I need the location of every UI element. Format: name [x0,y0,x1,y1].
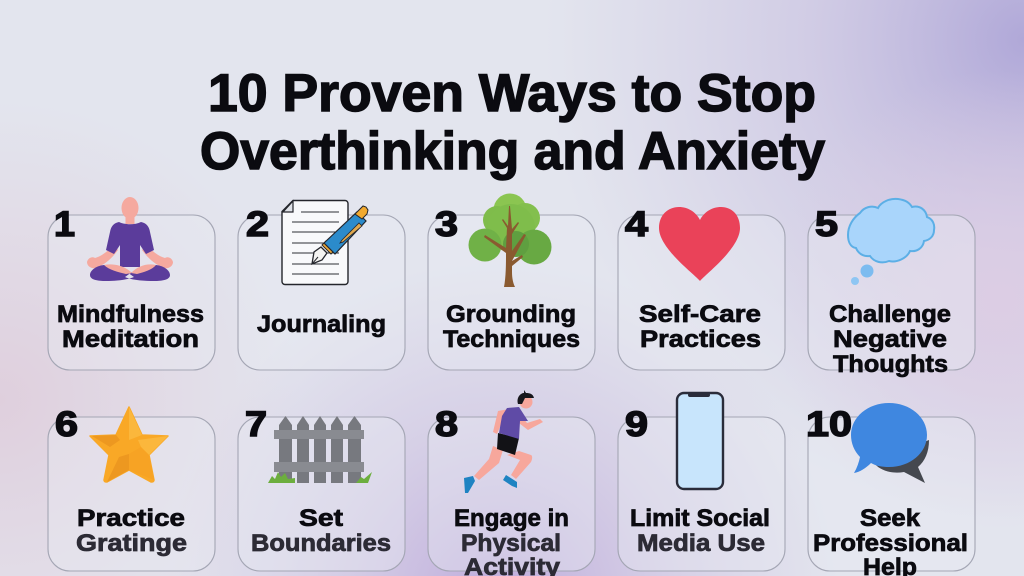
label: Journaling [257,311,386,338]
panel: 10 Seek Professional Help [806,403,975,576]
number 6: 6 [55,405,78,444]
label: Mindfulness [57,301,204,328]
panel: 5 Challenge Negative Thoughts [808,199,975,378]
panel: 6 Practice Gratinge [48,405,215,571]
icon: paper and pen [282,200,368,284]
number 2: 2 [246,205,269,244]
label [829,301,951,378]
label: Practices [640,326,761,353]
number 1: 1 [54,205,75,244]
label: Techniques [443,326,580,353]
icon: tree [468,194,552,287]
number 7: 7 [245,405,267,444]
label [57,301,204,353]
icon: runner [464,390,543,493]
label [454,505,569,576]
label: Seek [860,505,920,532]
label: Set [299,505,343,532]
title [200,64,826,181]
label [630,505,770,557]
label: Physical [461,530,561,557]
label: Challenge [829,301,951,328]
icon: smartphone [677,393,723,489]
panel: 9 Limit Social Media Use [618,393,785,571]
label: Limit Social [630,505,770,532]
number 10: 10 [806,405,852,444]
label: Negative [833,326,947,353]
label: Thoughts [833,351,948,378]
label [251,505,391,557]
label [639,301,761,353]
label: Professional [813,530,968,557]
label: Engage in [454,505,569,532]
label: Self-Care [639,301,761,328]
panel: 4 Self-Care Practices [618,205,785,370]
icon: thought cloud [848,199,934,285]
label: Grounding [446,301,576,328]
number 8: 8 [435,405,458,444]
number 9: 9 [625,405,648,444]
label: Boundaries [251,530,391,557]
icon: speech bubbles [851,403,929,483]
label: Media Use [637,530,765,557]
label: Gratinge [76,530,187,557]
panel: 3 Grounding Techniques [428,194,595,370]
number 5: 5 [815,205,838,244]
icon: meditating person [87,197,173,281]
title: Overthinking and Anxiety [200,122,826,181]
icon: heart [659,207,740,281]
panel: 2 Journaling [238,200,405,370]
label [76,505,187,557]
label [443,301,580,353]
label: Practice [77,505,185,532]
panel: 7 Set Boundaries [238,405,405,571]
number 4: 4 [625,205,649,244]
icon: star [90,407,168,482]
number 3: 3 [435,205,458,244]
title: 10 Proven Ways to Stop [208,64,816,123]
panel: 1 Mindfulness Meditation [48,197,215,370]
label [813,505,968,576]
panel: 8 Engage in Physical Activity [428,390,595,576]
label: Meditation [62,326,199,353]
icon: fence [268,416,372,483]
